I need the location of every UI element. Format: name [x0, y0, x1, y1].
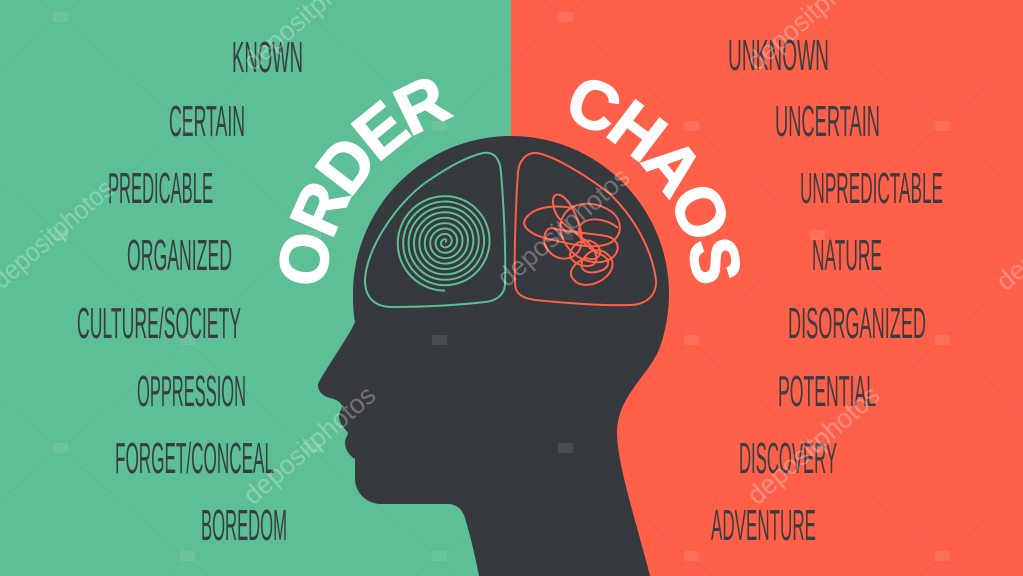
icon: tangled scribble: [524, 195, 620, 285]
infographic: order versus chaos: BOREDOM: [201, 501, 287, 550]
word list: chaos: DISCOVERY: [739, 434, 837, 483]
word list: chaos: [711, 31, 943, 550]
word list: order: [77, 33, 303, 550]
word list: chaos: ADVENTURE: [711, 501, 816, 550]
head silhouette: [318, 136, 669, 576]
infographic: order versus chaos: FORGET/CONCEAL: [115, 434, 274, 483]
word list: chaos: NATURE: [812, 231, 882, 280]
word list: order: PREDICABLE: [108, 164, 213, 213]
panel: chaos background: [511, 0, 1023, 576]
word list: chaos: UNKNOWN: [728, 31, 829, 80]
word list: order: CERTAIN: [169, 97, 245, 146]
watermarks: depositphotos: [741, 380, 885, 511]
watermarks: depositphotos: [237, 380, 381, 511]
panel: order background: [0, 0, 511, 576]
word list: chaos: POTENTIAL: [778, 367, 876, 416]
order brain hemisphere: [365, 153, 505, 307]
infographic: order versus chaos: KNOWN: [232, 33, 303, 82]
chaos brain hemisphere: [515, 153, 656, 305]
word list: chaos: UNCERTAIN: [775, 97, 880, 146]
heading: chaos: CHAOS: [570, 80, 740, 284]
icon: ordered spiral: [398, 196, 490, 291]
heading: order: ORDER: [279, 78, 454, 284]
word list: order: OPPRESSION: [137, 367, 246, 416]
watermarks: depositphotos: [491, 162, 635, 293]
word list: order: CULTURE/SOCIETY: [77, 299, 241, 348]
word list: order: ORGANIZED: [127, 231, 232, 280]
